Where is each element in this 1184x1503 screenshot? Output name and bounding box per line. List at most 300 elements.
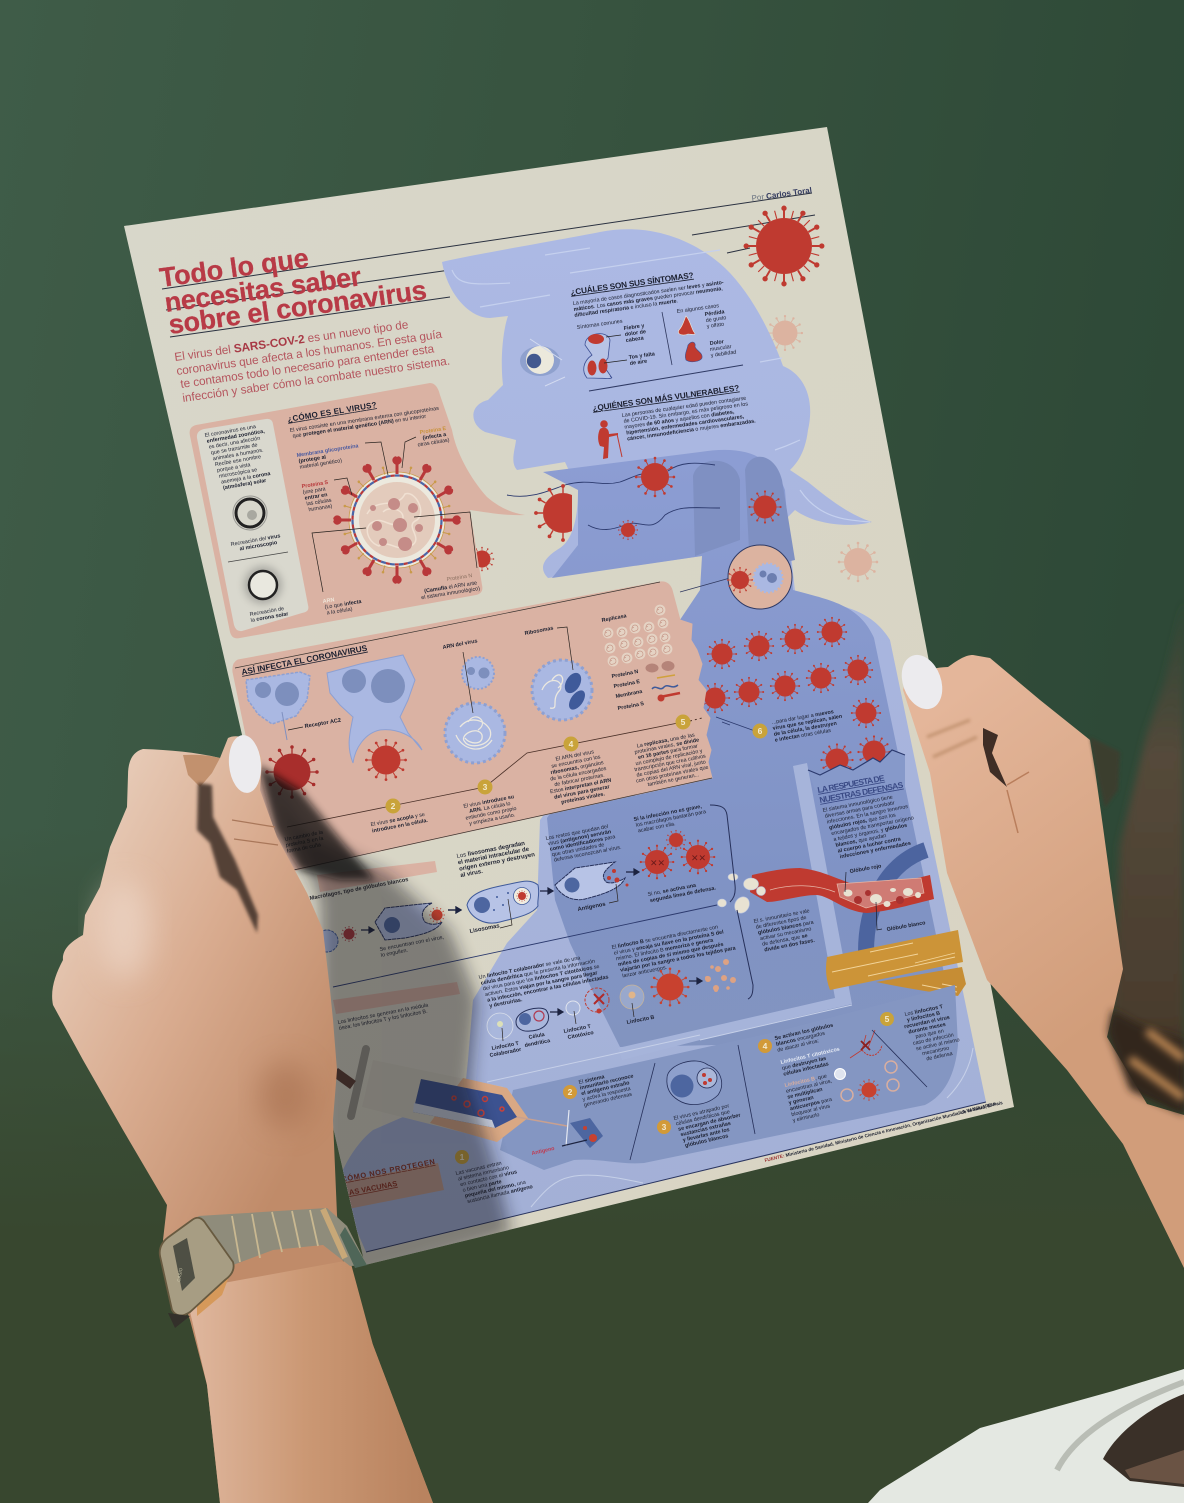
- bracket: [710, 805, 753, 999]
- panel: how the coronavirus infects: [233, 582, 712, 875]
- macrophage result text: [633, 803, 708, 835]
- step 5 text: [629, 731, 710, 790]
- left stage text under shadow: [284, 830, 326, 855]
- label: receptor: [288, 718, 342, 730]
- dark arch vessel: [866, 850, 926, 952]
- step badge 5: 5: [681, 717, 686, 727]
- replicase grid: Replicasa: [601, 613, 628, 624]
- caption: microscope: Recreación del virus: [230, 533, 281, 548]
- forearm tone: [185, 1260, 433, 1503]
- publication mark: LA VANGUARDIA: [959, 1101, 997, 1115]
- icon: helper T cell: [487, 1013, 513, 1041]
- coronavirus explanation: enfermedad zoonótica,: [206, 429, 266, 445]
- step 5 text: un complejo de replicación y: [635, 748, 703, 767]
- second line text: segunda línea de defensa.: [649, 885, 717, 904]
- defences text: al cuerpo a luchar contra: [837, 836, 902, 855]
- virus: pale behind hair: [768, 316, 802, 350]
- intro paragraph: infección y saber cómo la combate nuestro sistema.: [181, 354, 451, 405]
- light frame band: [618, 763, 852, 1060]
- figure: darker throat and torso: [543, 450, 958, 1047]
- legend: proteins: Proteína N: [611, 669, 639, 680]
- antigen injection point: [531, 1110, 603, 1157]
- heading: infects: ASÍ INFECTA EL CORONAVIRUS: [240, 642, 368, 677]
- step badge 5: [676, 714, 690, 730]
- step 4 white cells: que destruyen las: [781, 1056, 827, 1072]
- defences text: diversas armas para combatir: [824, 800, 895, 820]
- step 4 white cells: blancos encargados: [775, 1031, 826, 1048]
- icon: nose: [678, 316, 695, 335]
- step 5 memory cells text: de defensa: [926, 1051, 953, 1062]
- leader lines: [312, 437, 477, 592]
- intro white column: [197, 419, 308, 631]
- step 4 white cells: anticuerpos para: [789, 1097, 833, 1112]
- immune phases text: glóbulos blancos para: [757, 920, 814, 936]
- label: common symptoms: Síntomas comunes: [576, 319, 623, 331]
- step 6 callout: virus que se replican, salen: [772, 714, 843, 732]
- label: protein N: el sistema inmunológico): [421, 586, 481, 601]
- defences text: a tejidos y órganos, y glóbulos: [833, 823, 908, 843]
- intro paragraph: El virus del SARS-COV-2 es un nuevo tipo de: [173, 317, 410, 364]
- lysosome text: origen externo y destruyen: [459, 852, 536, 873]
- virus: pale beside neck: [839, 543, 877, 581]
- label: membrane: Membrana glicoproteína: [296, 443, 360, 459]
- step 5 memory cells text: 5: [885, 1014, 890, 1024]
- step 3 macrophage cell: [657, 1061, 746, 1150]
- step 4 white cells: y generan: [788, 1095, 814, 1106]
- left forearm and hand: [52, 734, 433, 1503]
- step 5 memory cells text: para que en: [915, 1028, 944, 1040]
- lysosome text: [456, 839, 537, 879]
- icon: head and lungs: [584, 334, 627, 378]
- virus intro text: que protegen el material genético (ARN) en su interior: [292, 414, 427, 440]
- macrophage cell with antigens: [555, 862, 628, 900]
- step 4 text: se encuentra con los: [551, 754, 601, 770]
- lower room panel: [500, 985, 958, 1170]
- step badge 2: [386, 798, 400, 814]
- step badge 3: 3: [483, 782, 488, 792]
- gap between thumb and fingers: [197, 783, 258, 933]
- macrophage stage: Macrófagos, tipo de glóbulos blancos: [309, 877, 409, 902]
- caption: corona: [250, 606, 288, 622]
- step 4 text: proteínas virales.: [561, 791, 606, 806]
- step 5 text: proteínas virales, se divide: [634, 737, 700, 756]
- pink tag: lymphocytes heading: [333, 982, 460, 1014]
- step 2 vaccine: [563, 1068, 638, 1109]
- heading: how is the virus: ¿CÓMO ES EL VIRUS?: [287, 400, 377, 424]
- T cell text: a la infección, encontrar a las células infectadas: [487, 974, 609, 1004]
- left stage text under shadow: Un cambio de la: [284, 830, 324, 843]
- coronavirus explanation: (atmósfera) solar: [223, 478, 268, 491]
- icon: dendritic cell: [516, 1008, 549, 1031]
- vaccine heading label: CÓMO NOS PROTEGEN: [341, 1157, 436, 1184]
- step 4 white cells: y eliminarlo: [792, 1112, 820, 1124]
- inset circle at neck: [680, 545, 792, 609]
- label: red blood cell: Glóbulo rojo: [849, 863, 883, 875]
- fever and cough labels: dolor de: [624, 329, 646, 338]
- step 3 macrophage cell: glóbulos blancos: [684, 1133, 729, 1149]
- step 6 callout: ...para dar lugar a nuevos: [771, 709, 834, 726]
- steps timeline: [287, 722, 683, 827]
- step 1 vaccines: en contacto con el virus: [460, 1169, 518, 1188]
- T cell text: Un linfocito T colaborador se vale de una: [478, 955, 581, 981]
- symptoms intro text: dificultad respiratoria e incluso la muerte.: [574, 298, 679, 319]
- step 5 text: también se generan...: [647, 772, 700, 788]
- wristwatch: [160, 1208, 367, 1328]
- cell 1 with receptor: [246, 672, 310, 740]
- label: protein E: (infecta a: [422, 432, 448, 442]
- label: antigens: [577, 884, 618, 913]
- RNA label: [442, 638, 478, 713]
- replicase grid: [601, 605, 672, 666]
- step 3 text: [463, 794, 518, 828]
- B cell text: el virus y encaja su llave en la proteína S del: [613, 929, 725, 957]
- T cell text: del virus para que los linfocitos T citotóxicos se: [482, 964, 600, 992]
- sources footer: FUENTE: Ministerio de Sanidad, Ministerio de Ciencia e Innovación, Organización Mundial de la Salud, El País: [764, 1100, 1003, 1163]
- intro paragraph: coronavirus que afecta a los humanos. En esta guía: [175, 327, 443, 378]
- thumb knuckle creases: [927, 720, 977, 757]
- fever and cough labels: Tos y falta: [628, 351, 656, 361]
- hair highlight strokes: [452, 248, 870, 522]
- step 6 callout: 6: [758, 726, 763, 736]
- lysosome text: el material intracelular de: [457, 847, 530, 866]
- title: Todo lo que: [158, 243, 310, 293]
- symptoms intro text: La mayoría de casos diagnosticados suelen ser leves y asinto-: [572, 280, 724, 307]
- virus: large top right: [744, 206, 824, 286]
- step 6 callout: de la célula, la destruyen: [773, 721, 837, 738]
- cell labels: dendrítica: [524, 1038, 552, 1049]
- fever and cough labels: cabeza: [625, 335, 645, 344]
- vulnerable text: [621, 395, 757, 443]
- legend: proteins: [611, 661, 680, 712]
- destroyed viruses: ✕✕: [650, 858, 665, 868]
- antigen injection point: Antígeno: [531, 1146, 556, 1157]
- label: membrane: [296, 443, 362, 471]
- T cell text: [478, 951, 610, 1010]
- fever and cough labels: [624, 324, 655, 365]
- divider 1: [630, 1063, 655, 1160]
- step 5 text: de copias del ARN viral, junto: [636, 759, 706, 779]
- smell and muscle labels: de gusto: [705, 315, 727, 324]
- step badge 3: [478, 780, 492, 794]
- step 5 text: en 16 partes para formar: [638, 743, 699, 761]
- title: necesitas saber: [163, 261, 363, 318]
- virus at cell 2: [366, 740, 406, 780]
- coronavirus explanation: microscópica se: [219, 467, 258, 480]
- heading: defences: NUESTRAS DEFENSAS: [819, 780, 904, 805]
- second line text: Si no, se activa una: [647, 883, 698, 898]
- step 4 white cells: bloquear al virus: [791, 1103, 831, 1118]
- step 2 text: El virus se acopla y se: [370, 812, 425, 828]
- step 1 vaccines: pequeña del mismo, una: [464, 1180, 526, 1199]
- legend: proteins: Membrana: [615, 689, 644, 700]
- cell 2 engulfing virus: [327, 655, 422, 763]
- credit: author: Por Carlos Toral: [751, 186, 812, 203]
- macrophage result text: Si la infección no es grave,: [633, 804, 703, 823]
- virus intro text: El virus consiste en una membrana externa con glucoproteínas: [289, 406, 440, 434]
- coronavirus explanation: animales a humanos.: [212, 447, 264, 462]
- antibody dots: [705, 959, 736, 992]
- separator rule: [589, 365, 743, 391]
- vaccine heading label: LAS VACUNAS: [344, 1179, 398, 1198]
- hair on the right: [1110, 600, 1184, 1112]
- step 5 memory cells text: Los linfocitos T: [904, 1004, 944, 1018]
- step 1 vaccines: [455, 1150, 534, 1206]
- right hand and arm: [895, 649, 1184, 1268]
- left stage text under shadow: proteína S en la: [285, 836, 324, 849]
- cell labels: Linfocito T: [563, 1024, 592, 1035]
- step 2 vaccine: El sistema: [578, 1074, 606, 1086]
- lysosome text: al virus.: [460, 869, 484, 879]
- coronavirus explanation: porque a vista: [217, 462, 251, 474]
- step 1 vaccines: 1: [460, 1152, 465, 1162]
- virus entering cell 1: [267, 747, 317, 797]
- step badge 4: 4: [569, 739, 574, 749]
- B cell text: lanzar anticuerpos.: [622, 965, 668, 979]
- finger creases: [1007, 772, 1029, 833]
- wristwatch: CASIO: [176, 1267, 184, 1282]
- viruses in throat: [619, 458, 781, 539]
- step 4 white cells: Linfocitos B, que: [784, 1073, 828, 1089]
- step 4 text: El ARN del virus: [555, 749, 595, 763]
- step 1 vaccines: al sistema inmunitario: [457, 1165, 510, 1183]
- step 3 text: y empieza a usarlo.: [469, 812, 516, 827]
- smell and muscle labels: [704, 309, 737, 359]
- divider 3: [872, 1030, 927, 1087]
- label: protein E: [415, 426, 450, 448]
- step 5 text: con otras proteínas virales que: [636, 765, 709, 785]
- T cell text: activen. Estos viajan por la sangre para llegar: [485, 970, 599, 998]
- step 6 callout: e infectan otras células: [774, 728, 832, 744]
- antigen remains text: que otras unidades de: [551, 842, 605, 858]
- coronavirus explanation: El coronavirus es una: [204, 424, 256, 439]
- antigen remains text: virus (antígenos) servirán: [547, 829, 612, 847]
- divider 2: [738, 1045, 755, 1134]
- step 4 text: de la célula encargados: [550, 766, 607, 783]
- step 6 callout: [716, 708, 845, 744]
- pale rim lines: [487, 1005, 973, 1207]
- hand shadow on poster: dark band: [258, 765, 375, 880]
- step 4 text: Estos interpretan el ARN: [550, 778, 612, 795]
- tag caption: ósea: los linfocitos T y los linfocitos B.: [338, 1009, 428, 1032]
- title: [158, 253, 426, 334]
- B cell text: miles de copias de sí mismo que después: [618, 942, 724, 968]
- destroyed viruses: ✕✕: [691, 853, 706, 863]
- arrows between stages: [448, 869, 702, 1015]
- step 5 text: transcripción que crea cultivos: [634, 753, 707, 773]
- step 3 macrophage cell: 3: [662, 1122, 667, 1132]
- step 5 memory cells text: recuerdan el virus: [904, 1015, 950, 1030]
- title: sobre el coronavirus: [167, 275, 428, 340]
- coronavirus explanation: es decir, una afección: [208, 436, 261, 451]
- symptoms intro text: máticos. Los casos más graves pueden provocar neumonía,: [573, 286, 724, 313]
- large cell with RNA: [445, 703, 505, 763]
- step 4 text: ribosomas, orgánulos: [550, 760, 605, 776]
- icon: muscle arm: [685, 342, 702, 362]
- gap between thumb and finger: [983, 728, 1007, 787]
- panel: what the virus is like: [190, 383, 525, 638]
- immune phases text: de diferentes tipos de: [755, 915, 807, 931]
- left stage text under shadow: forma de cuña: [287, 842, 322, 855]
- step 3 macrophage cell: sustancias extrañas: [680, 1121, 732, 1138]
- header rule lines: [162, 193, 815, 337]
- coronavirus explanation: Recibe ese nombre: [215, 454, 262, 468]
- bottom rule: [366, 1102, 986, 1252]
- step 3 macrophage cell: se encargan de absorber: [678, 1112, 742, 1133]
- smell and muscle labels: muscular: [709, 344, 732, 353]
- caption: corona: Recreación de: [249, 606, 285, 618]
- label: protein E: otras células): [417, 437, 450, 448]
- divider: [662, 312, 672, 365]
- B cell text: mismo. El linfocito B memoriza e genera: [615, 937, 715, 962]
- step 1 vaccines: Las vacunas entran: [455, 1161, 502, 1177]
- macrophage result text: acabar con ella.: [637, 821, 676, 834]
- vulnerable text: mayores de 60 años y aquellos con diabetes,: [624, 409, 735, 431]
- label: ARN: [322, 593, 364, 617]
- label: lysosomes: Lisosomas: [469, 923, 500, 935]
- hand shadow on poster: wide soft layer: [262, 770, 512, 1280]
- label: ARN: (Lo que infecta: [324, 599, 363, 611]
- step 3 macrophage cell: y llevarlas ante los: [682, 1127, 730, 1144]
- thumbnail white: [227, 734, 263, 794]
- vulnerable text: Las personas de cualquier edad pueden contagiarse: [621, 396, 747, 419]
- intro paragraph: te contamos todo lo necesario para entender esta: [179, 341, 435, 391]
- virus in mouth: [534, 484, 572, 542]
- defences text: encargados de transportar oxígeno: [831, 815, 914, 837]
- step 2 vaccine: inmunitario reconoce: [579, 1073, 634, 1092]
- heading: defences: LA RESPUESTA DE: [817, 773, 886, 795]
- icon: infected cell: [585, 988, 609, 1014]
- step 4 white cells: células infectadas: [783, 1061, 829, 1078]
- defences text: blancos, que ayudan: [835, 833, 887, 849]
- intro paragraph: [173, 317, 451, 405]
- cell with lysosomes: [467, 881, 539, 923]
- panel: symptoms: [570, 270, 757, 459]
- cell labels: Linfocito B: [626, 1015, 655, 1026]
- immune phases text: El s. inmunitario se vale: [753, 908, 810, 925]
- legend: proteins: Proteína S: [617, 701, 645, 712]
- legend: proteins: Proteína E: [613, 679, 641, 690]
- microscope image of virus: [233, 496, 267, 530]
- step 5 memory cells text: caso de infección: [912, 1032, 954, 1047]
- step 3 text: entiende como propio: [465, 806, 517, 822]
- vaccine heading label: [337, 1157, 444, 1210]
- symptoms intro text: [572, 280, 726, 319]
- step 4 text: de fabricar proteínas.: [554, 773, 605, 788]
- step 5 text: La replicasa, una de las: [636, 732, 696, 750]
- step badge 4: [564, 736, 578, 752]
- step 4 white cells: encuentran al virus,: [785, 1078, 833, 1095]
- poster content: [158, 186, 1003, 1280]
- defence panel zig-zag with viruses: [808, 736, 905, 790]
- label: protein N: Proteína N: [446, 573, 473, 583]
- figure silhouette: light blue body: [337, 229, 986, 1252]
- RNA label: ARN del virus: [442, 638, 478, 651]
- throat wavy lines: [507, 463, 720, 530]
- eye: [520, 339, 565, 386]
- label: lysosomes: [469, 899, 512, 935]
- tag caption: Los linfocitos se generan en la médula: [337, 1003, 429, 1026]
- smell and muscle labels: Dolor: [709, 339, 725, 347]
- virus cluster in chest: [701, 618, 880, 727]
- small cell with nuclei: [462, 657, 494, 689]
- label: antigens: Antígenos: [577, 902, 606, 913]
- cell labels: [489, 1015, 655, 1059]
- antigen remains text: Los restos que quedan del: [545, 824, 609, 842]
- step 4 white cells: se multiplican: [787, 1087, 823, 1101]
- step 5 memory cells text: y linfocitos B: [906, 1011, 941, 1024]
- label: protein S: [301, 480, 333, 514]
- defences text: infecciones y enfermedades: [839, 841, 911, 860]
- poster sheet: [124, 127, 1014, 1265]
- label: protein S: Proteína S: [301, 480, 329, 490]
- thumb creases: [232, 820, 278, 845]
- step 3 text: ARN. La célula lo: [469, 801, 511, 815]
- virus by panel: [476, 546, 494, 572]
- B cell text: [611, 922, 738, 980]
- diagram: virus cross-section: [333, 456, 461, 584]
- thumbnail white: [895, 649, 949, 715]
- step 5 memory cells text: mecanismo: [922, 1046, 950, 1057]
- coronavirus explanation: [204, 425, 271, 490]
- white cells leaving vessel: [718, 874, 766, 916]
- step 4 text: del virus para generar: [554, 784, 611, 801]
- vulnerable text: cáncer, inmunodeficiencia o mujeres embarazadas.: [627, 418, 757, 442]
- label: protein S: entrar en: [304, 492, 328, 502]
- step 4 white cells: 4: [763, 1041, 768, 1051]
- label: membrane: (protege al: [298, 454, 327, 465]
- image: solar corona: [244, 566, 282, 604]
- immune phases text: activar su mecanismo: [760, 926, 812, 942]
- cell labels: Colaborador: [489, 1047, 523, 1059]
- smell and muscle labels: y debilidad: [710, 349, 737, 359]
- step 2 text: [370, 811, 429, 835]
- pink tag: macrophages heading: [317, 861, 437, 892]
- cell labels: Citotóxico: [567, 1030, 595, 1041]
- step 4 white cells: Se activan los glóbulos: [774, 1023, 834, 1042]
- macrophage result text: los macrófagos bastarán para: [635, 809, 707, 829]
- step 3 macrophage cell: El virus es atrapado por: [673, 1103, 730, 1122]
- throat lobes: [693, 457, 795, 570]
- label: in some cases: En algunos casos: [676, 303, 720, 315]
- destroyed viruses: [641, 831, 714, 878]
- label: protein S: las células: [306, 498, 332, 507]
- step 5 memory cells text: durante meses: [908, 1022, 946, 1036]
- coronavirus explanation: que se transmite de: [210, 442, 258, 456]
- icon: B cell meets virus: [620, 969, 688, 1017]
- split line between defence phases: [333, 905, 717, 987]
- step 2 vaccine: 2: [568, 1087, 573, 1097]
- immune phases text: divide en dos fases.: [764, 938, 816, 953]
- cell labels: Célula: [528, 1032, 546, 1041]
- label: protein S: (une para: [302, 486, 326, 496]
- T cell text: célula dendrítica que le presenta la información: [480, 959, 596, 987]
- fever and cough labels: Fiebre y: [623, 323, 645, 332]
- label: protein E: Proteína E: [419, 426, 447, 436]
- B cell text: El linfocito B se encuentra directamente con: [611, 924, 719, 951]
- label: white blood cell: Glóbulo blanco: [886, 920, 927, 933]
- defences text: infecciones. En la sangre tenemos: [827, 804, 909, 826]
- smell and muscle labels: Pérdida: [704, 309, 726, 318]
- step 5 memory cells text: se active al mismo: [916, 1037, 960, 1052]
- macrophage stage: lo engullen.: [380, 948, 409, 959]
- ribosome label: [524, 626, 573, 670]
- cell labels: Linfocito T: [491, 1041, 520, 1052]
- macrophage stage: Se encuentran con el virus,: [379, 935, 445, 953]
- step 1 vaccines: sustancia llamada antígeno: [467, 1184, 534, 1205]
- hair falling over hand: [1090, 737, 1184, 1115]
- label: receptor: Receptor AC2: [304, 718, 342, 730]
- wrist shading: [259, 1061, 311, 1129]
